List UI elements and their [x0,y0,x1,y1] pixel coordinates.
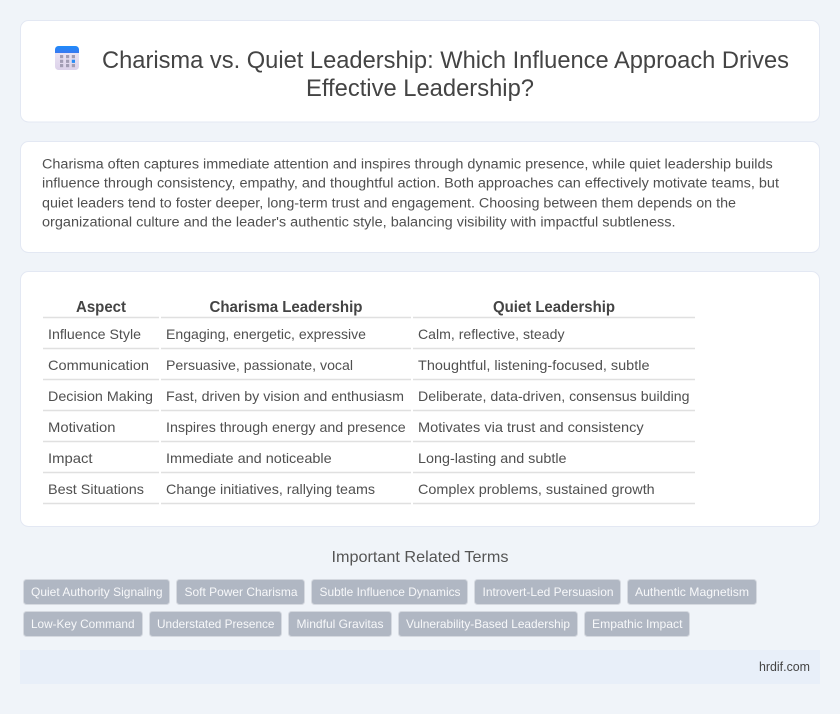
row: decision making: Decision Making [48,388,153,404]
icon: calendar [55,46,79,70]
title: Charisma vs. Quiet Leadership: Which Influence Approach Drives [102,47,789,74]
intro paragraph: organizational culture and the leader's authentic style, balancing visibility with impactful subtleness. [42,215,676,231]
row: communication: Communication [48,357,149,373]
row: impact: Immediate and noticeable [166,450,332,466]
tag: Soft Power Charisma [184,585,298,599]
table header: Aspect [76,299,126,316]
tag [628,580,756,604]
row: decision making [48,388,690,404]
intro paragraph: influence through consistency, empathy, and thoughtful action. Both approaches can effectively motivate teams, but [42,176,779,192]
row: influence style: Calm, reflective, steady [418,326,564,342]
tag [176,580,304,604]
tag [312,580,468,604]
tag [398,612,578,636]
tag: Vulnerability-Based Leadership [406,617,570,631]
intro paragraph [42,156,779,231]
row: best situations: Change initiatives, rallying teams [166,481,375,497]
tag [474,580,620,604]
table header: Quiet Leadership [493,299,615,316]
row: communication: Persuasive, passionate, vocal [166,357,353,373]
row: communication: Thoughtful, listening-focused, subtle [418,357,650,373]
row: influence style: Influence Style [48,326,141,342]
row: impact: Long-lasting and subtle [418,450,567,466]
tag [24,612,142,636]
row: influence style: Engaging, energetic, expressive [166,326,366,342]
row: best situations: Complex problems, sustained growth [418,481,655,497]
tag: Empathic Impact [592,617,683,631]
footer bar [20,650,820,684]
related terms tags [24,580,756,636]
row: influence style [48,326,564,342]
row: motivation: Motivates via trust and consistency [418,419,644,435]
header panel [20,20,820,122]
tag [288,612,392,636]
intro paragraph: Charisma often captures immediate attention and inspires through dynamic presence, while quiet leadership builds [42,156,773,172]
tag: Introvert-Led Persuasion [482,585,614,599]
panel: intro text [20,142,820,252]
row: best situations [48,481,655,497]
row: motivation [48,419,644,435]
title: Effective Leadership? [306,75,534,102]
table header: Charisma Leadership [210,299,362,316]
footer source: hrdif.com [759,660,810,674]
table header [76,299,615,316]
row: impact: Impact [48,450,93,466]
intro paragraph: quiet leaders tend to foster deeper, long-term trust and engagement. Choosing between them depends on the [42,195,736,211]
row: communication [48,357,650,373]
tag: Subtle Influence Dynamics [320,585,460,599]
tag: Mindful Gravitas [296,617,384,631]
row: motivation: Motivation [48,419,116,435]
tag: Authentic Magnetism [635,585,749,599]
row: impact [48,450,567,466]
row: decision making: Fast, driven by vision and enthusiasm [166,388,404,404]
row: decision making: Deliberate, data-driven, consensus building [418,388,690,404]
row: best situations: Best Situations [48,481,144,497]
title [102,47,789,102]
tag [150,612,282,636]
panel: comparison table [20,272,820,526]
tag [584,612,690,636]
row: motivation: Inspires through energy and presence [166,419,406,435]
tag: Low-Key Command [31,617,134,631]
heading: related terms: Important Related Terms [332,549,508,566]
tag: Quiet Authority Signaling [31,585,162,599]
tag [24,580,170,604]
tag: Understated Presence [157,617,275,631]
